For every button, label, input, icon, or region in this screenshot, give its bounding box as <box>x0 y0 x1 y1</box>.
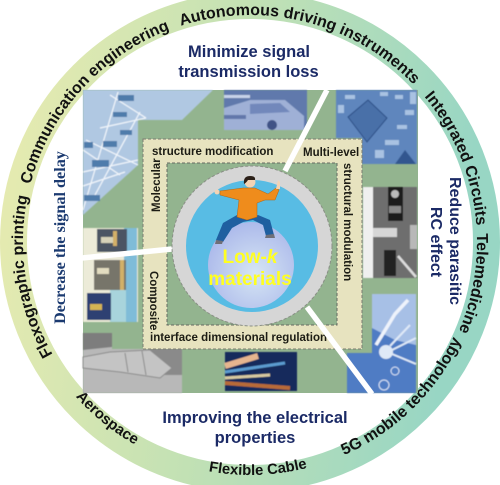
label: Composite: Composite <box>147 271 159 330</box>
heading: minimize signal transmission loss: transmission loss <box>178 63 319 81</box>
ring label: Flexible Cable: Flexible Cable <box>210 459 306 476</box>
heading: reduce parasitic RC effect <box>427 177 463 305</box>
heading: decrease the signal delay: Decrease the signal delay <box>51 151 69 324</box>
label: interface dimensional regulation: interface dimensional regulation <box>150 332 327 344</box>
photo: car <box>224 90 307 130</box>
photo: industrial plant <box>83 228 138 322</box>
label: Molecular: Molecular <box>151 158 163 212</box>
ring label: Autonomous driving instruments: Autonomous driving instruments <box>181 6 418 84</box>
sphere <box>208 222 294 308</box>
icon: tai chi figure <box>214 176 280 244</box>
central Low-k circle <box>172 166 332 326</box>
heading: improving the electrical properties: Improving the electrical <box>162 409 348 427</box>
photo: microscope apparatus <box>363 187 417 278</box>
heading: reduce parasitic RC effect: RC effect <box>427 207 444 278</box>
photo: spacecraft <box>83 333 182 393</box>
ring label: Aerospace: Aerospace <box>76 393 138 444</box>
heading: improving the electrical properties <box>162 409 348 447</box>
beige frame: composite multi-level structure <box>143 139 362 349</box>
heading: improving the electrical properties: properties <box>215 429 295 447</box>
ring label: Telemedicine: Telemedicine <box>460 234 488 333</box>
photo: transmission tower <box>83 90 213 215</box>
ring label: 5G mobile technology: 5G mobile technology <box>340 336 462 454</box>
photo: flexible cables <box>225 352 297 391</box>
white connector lines <box>82 90 372 394</box>
label: structure modification: structure modification <box>152 146 273 158</box>
ring label: Flexographic printing: Flexographic printing <box>11 196 52 359</box>
green square panel <box>83 90 418 393</box>
heading: reduce parasitic RC effect: Reduce parasitic <box>446 177 463 305</box>
photo: 5G network <box>347 294 416 393</box>
inner green panel <box>167 163 337 325</box>
ring label: Integrated Circuits: Integrated Circuits <box>425 90 486 225</box>
label: structural modulation: structural modulation <box>341 163 353 281</box>
label: Low-k materials: Low-k <box>223 247 277 268</box>
photo: circuit board chip <box>336 90 417 164</box>
label: Multi-level: Multi-level <box>303 147 359 159</box>
ring label: Communication engineering: Communication engineering <box>21 22 170 183</box>
label: Low-k materials: materials <box>208 269 292 290</box>
heading: minimize signal transmission loss <box>178 43 319 81</box>
heading: minimize signal transmission loss: Minimize signal <box>188 43 310 61</box>
